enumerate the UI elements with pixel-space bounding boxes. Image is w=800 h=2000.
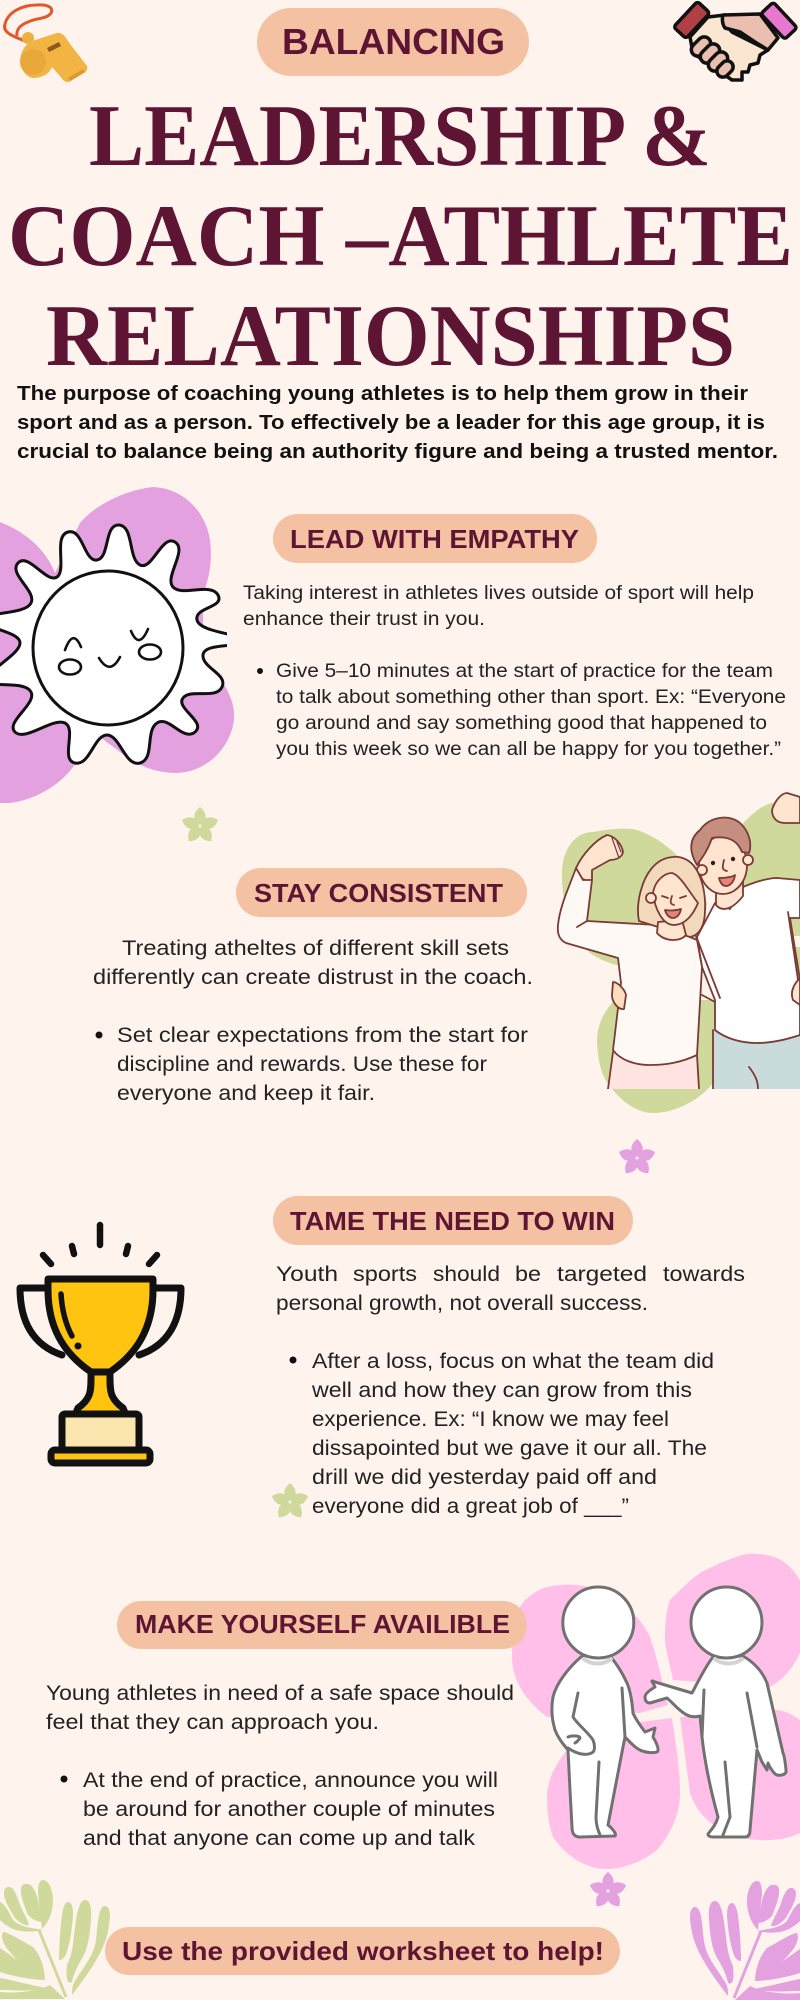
bullet text: go around and say something good that happened to — [276, 713, 767, 734]
bullet text: you this week so we can all be happy for you together.” — [276, 739, 781, 760]
heading pill — [117, 1601, 527, 1649]
bullet text: discipline and rewards. Use these for — [117, 1052, 487, 1076]
icon: green flower small — [270, 1483, 310, 1521]
bullet text: Set clear expectations from the start for — [117, 1023, 528, 1047]
body text: be — [515, 1262, 541, 1286]
bullet text: After a loss, focus on what the team did — [312, 1349, 714, 1373]
intro text: sport and as a person. To effectively be a leader for this age group, it is — [17, 411, 765, 434]
title: LEADERSHIP & — [89, 88, 711, 185]
heading pill: balancing — [257, 8, 529, 76]
bullet text — [60, 1768, 498, 1850]
body text: Taking interest in athletes lives outside of sport will help — [243, 583, 754, 604]
icon: handshake — [674, 1, 797, 80]
heading pill: LEAD WITH EMPATHY — [290, 524, 579, 554]
body text: should — [433, 1262, 500, 1286]
woman's shirt — [558, 868, 702, 1065]
bullet text: Give 5–10 minutes at the start of practice for the team — [276, 661, 773, 682]
intro text: crucial to balance being an authority figure and being a trusted mentor. — [17, 440, 778, 463]
body text: differently can create distrust in the coach. — [93, 965, 533, 989]
icon: smiling sun — [0, 525, 245, 763]
body text: enhance their trust in you. — [243, 609, 485, 630]
icon: trophy — [20, 1225, 181, 1463]
bullet text: drill we did yesterday paid off and — [312, 1465, 657, 1489]
bullet text — [96, 1023, 528, 1105]
icon: pink flower — [617, 1139, 657, 1177]
icon: purple leaf — [690, 1881, 800, 2000]
bullet text: well and how they can grow from this — [311, 1378, 692, 1402]
body text: targeted — [557, 1262, 647, 1286]
woman's neck and face — [657, 920, 686, 940]
heading pill — [273, 514, 597, 563]
icon: whistle — [4, 5, 87, 82]
woman's forearm and fist — [576, 835, 623, 880]
woman's hair — [638, 857, 705, 937]
body text — [243, 583, 754, 630]
bullet text — [257, 661, 786, 760]
heading pill: STAY CONSISTENT — [254, 878, 503, 908]
bullet text — [290, 1349, 714, 1518]
call to action pill: Use the provided worksheet to help! — [122, 1936, 604, 1966]
bullet text: and that anyone can come up and talk — [83, 1826, 475, 1850]
icon: two figures talking — [552, 1587, 786, 1837]
body text: Youth — [276, 1262, 338, 1286]
body text — [93, 936, 533, 989]
body text: sports — [353, 1262, 417, 1286]
panel: make yourself available — [46, 1554, 800, 1869]
body text: towards — [663, 1262, 745, 1286]
heading pill: TAME THE NEED TO WIN — [290, 1206, 615, 1236]
body text — [276, 1262, 745, 1315]
bullet text: dissapointed but we gave it our all. The — [312, 1436, 707, 1460]
panel: tame the need to win — [20, 1196, 745, 1518]
title: RELATIONSHIPS — [46, 288, 735, 385]
illustration: two friends flexing — [558, 793, 800, 1113]
bullet text: experience. Ex: “I know we may feel — [312, 1407, 669, 1431]
body text: Treating atheltes of different skill sets — [122, 936, 509, 960]
intro text: The purpose of coaching young athletes is to help them grow in their — [17, 382, 748, 405]
call to action pill — [105, 1927, 620, 1975]
man's head — [716, 878, 743, 909]
body text: personal growth, not overall success. — [276, 1291, 648, 1315]
man's shirt and trousers — [713, 1030, 800, 1089]
panel: lead with empathy — [0, 487, 786, 803]
woman's trousers — [608, 1052, 699, 1089]
bullet text: be around for another couple of minutes — [83, 1797, 495, 1821]
heading pill: balancing: BALANCING — [282, 21, 505, 62]
bullet text: At the end of practice, announce you will — [83, 1768, 498, 1792]
bullet text: everyone and keep it fair. — [117, 1081, 375, 1105]
panel: stay consistent — [93, 793, 800, 1113]
heading pill: MAKE YOURSELF AVAILIBLE — [135, 1609, 510, 1639]
bullet text: everyone did a great job of ___” — [312, 1494, 629, 1518]
purple blob — [0, 487, 234, 803]
bullet text: to talk about something other than sport. Ex: “Everyone — [276, 687, 786, 708]
title — [8, 88, 793, 385]
intro text — [17, 382, 778, 463]
body text: Young athletes in need of a safe space should — [46, 1681, 514, 1705]
icon: purple flower — [588, 1872, 628, 1910]
body text: feel that they can approach you. — [46, 1710, 379, 1734]
man's fist — [772, 793, 800, 823]
body text — [46, 1681, 514, 1734]
title: COACH –ATHLETE — [8, 188, 793, 285]
heading pill — [236, 868, 527, 917]
pink blobs — [512, 1554, 800, 1869]
icon: green leaf — [0, 1880, 110, 1999]
icon: green flower — [180, 807, 220, 845]
woman's hand on shoulder — [612, 982, 626, 1009]
heading pill — [273, 1196, 633, 1245]
man's hand — [792, 978, 800, 1005]
